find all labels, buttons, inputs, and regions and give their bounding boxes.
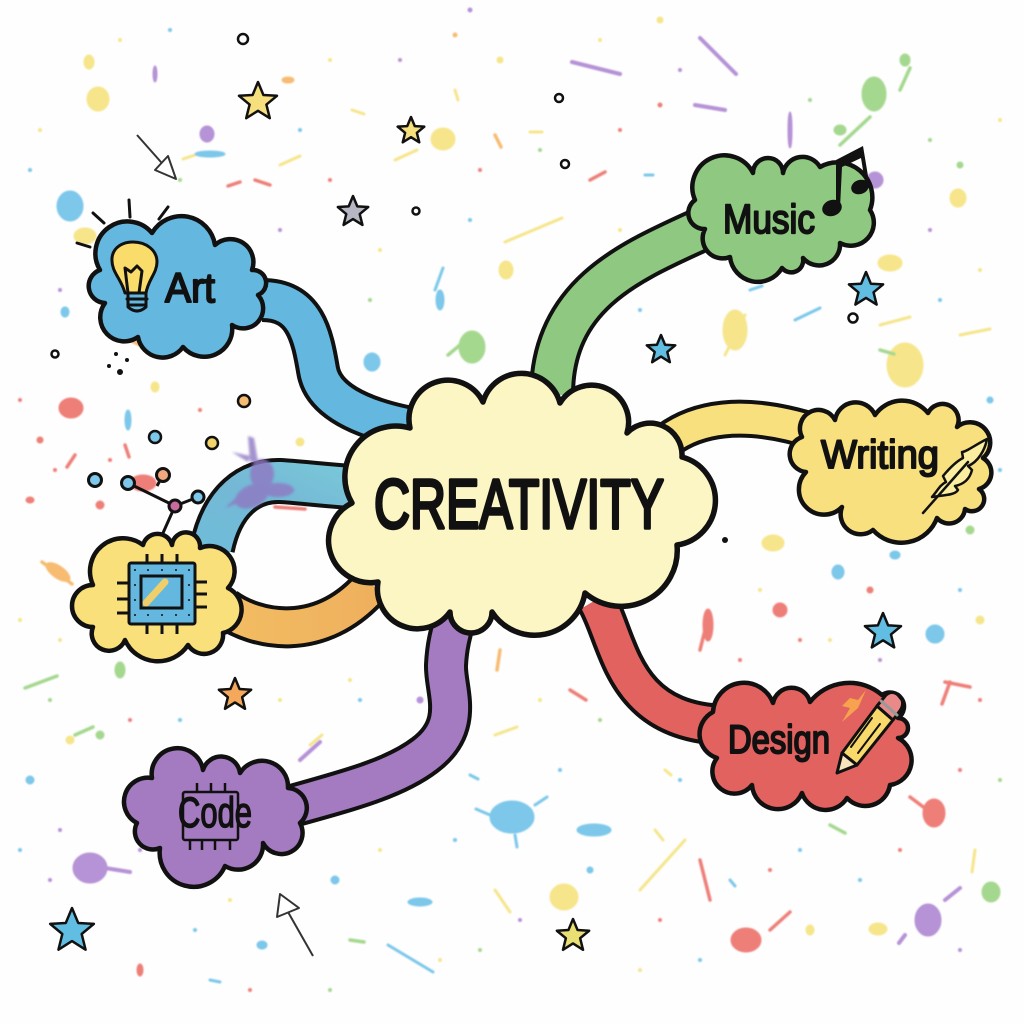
icon: quill bbox=[923, 439, 987, 513]
connector fill: chip upper bbox=[212, 481, 365, 548]
connector fill: chip lower bbox=[225, 585, 372, 627]
small rings and dots bbox=[52, 34, 858, 543]
connector fill: writing bbox=[668, 419, 815, 440]
node: chip bbox=[72, 532, 242, 661]
connector: design bbox=[596, 600, 725, 725]
paint smear on connector bbox=[225, 436, 296, 514]
connector fill: code bbox=[285, 605, 458, 808]
label: code: Code bbox=[178, 789, 252, 837]
node: writing bbox=[790, 401, 991, 543]
label: writing: Writing bbox=[821, 433, 939, 477]
connector fill: design bbox=[596, 600, 725, 725]
label: design: Design bbox=[728, 718, 830, 762]
title: CREATIVITY bbox=[374, 465, 664, 543]
connector: music bbox=[552, 230, 700, 395]
connector: code bbox=[285, 605, 458, 808]
icon: microchip bbox=[117, 554, 207, 634]
node: music bbox=[688, 146, 874, 282]
icon: music note bbox=[820, 146, 871, 219]
icon: light bulb bbox=[77, 200, 168, 311]
label: art: Art bbox=[165, 264, 215, 311]
connector fill: music bbox=[552, 230, 700, 395]
arrow: bottom bbox=[277, 894, 313, 956]
node: art bbox=[77, 200, 266, 358]
connector: chip upper bbox=[212, 481, 365, 548]
paint mark bbox=[842, 690, 866, 722]
icon: pencil bbox=[837, 692, 903, 773]
stars bbox=[50, 82, 901, 950]
node: design bbox=[700, 683, 912, 810]
central cloud bbox=[329, 373, 715, 635]
connector: writing bbox=[668, 419, 815, 440]
connector: art bbox=[262, 300, 435, 432]
connector: chip lower bbox=[225, 585, 372, 627]
network nodes bbox=[88, 468, 204, 533]
icon: code chip outline bbox=[183, 783, 238, 850]
label: music: Music bbox=[723, 196, 815, 242]
arrow: top left bbox=[137, 135, 176, 179]
connector fill: art bbox=[262, 300, 435, 432]
node: code bbox=[124, 748, 307, 887]
